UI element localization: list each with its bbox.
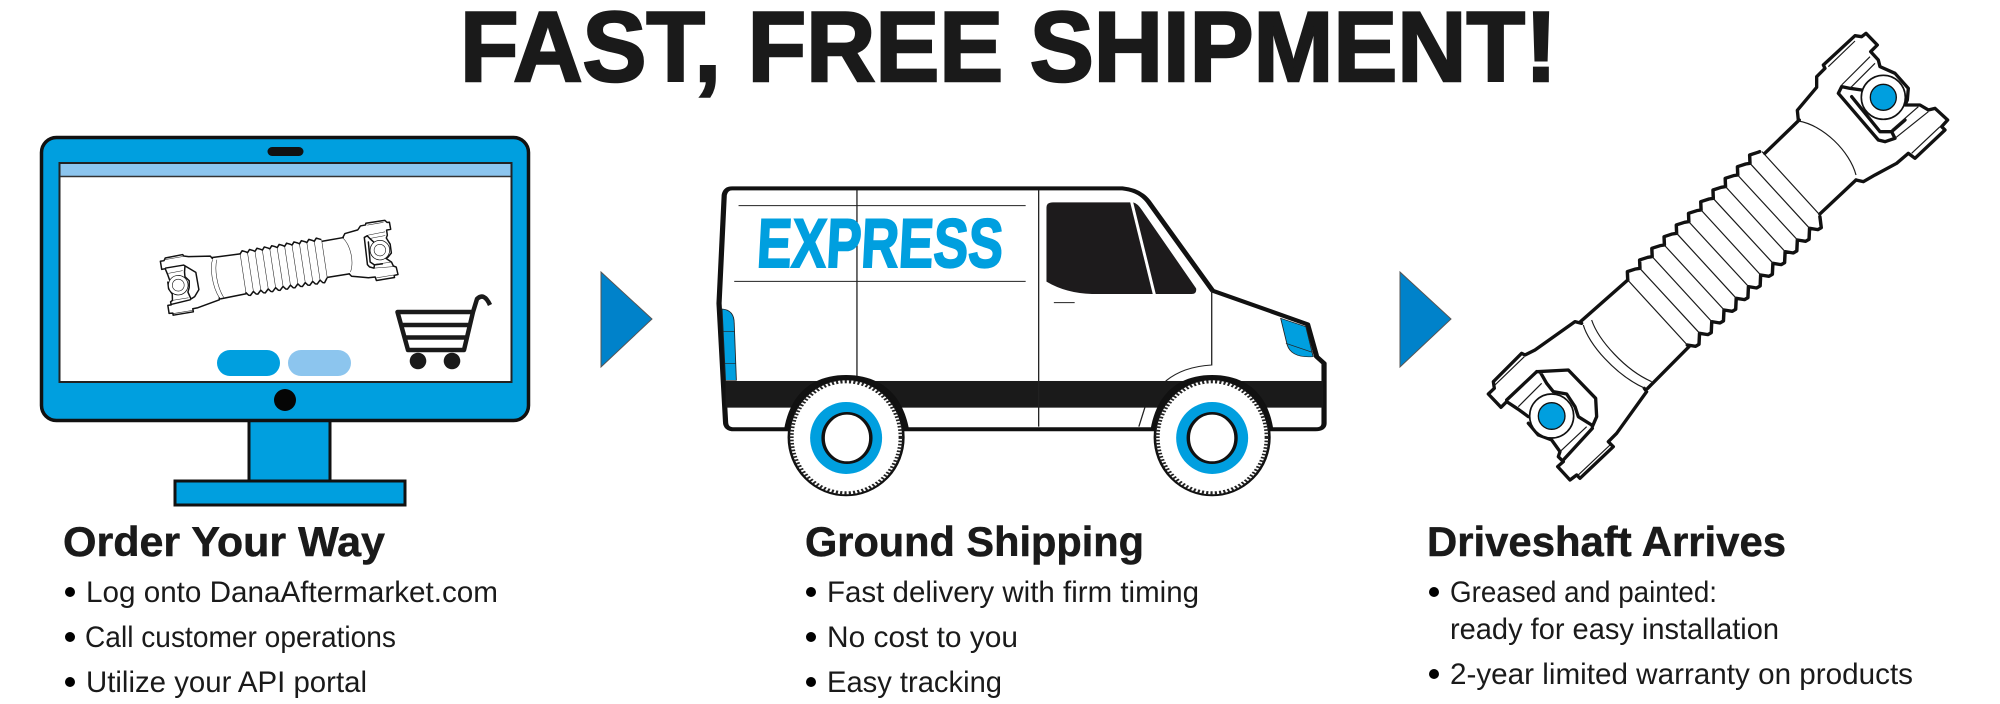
heading: Order Your Way (63, 518, 386, 565)
monitor base (175, 481, 405, 505)
list item: Easy tracking (827, 666, 1002, 699)
panel lines (734, 190, 1212, 427)
camera (274, 389, 296, 411)
monitor stand (249, 420, 330, 482)
rear wheel (784, 375, 909, 495)
heading: Ground Shipping (805, 518, 1144, 565)
list item (1429, 576, 1779, 646)
monitor frame (42, 138, 528, 420)
arrow 1 (601, 272, 652, 367)
list item: 2-year limited warranty on products (1450, 658, 1913, 691)
headlight (1281, 318, 1313, 357)
black band (726, 381, 1323, 408)
icon: delivery van (719, 188, 1324, 495)
list item: Greased and painted: (1450, 576, 1717, 609)
list item: Fast delivery with firm timing (827, 576, 1199, 609)
arrow 2 (1400, 272, 1451, 367)
list item: No cost to you (827, 621, 1018, 654)
icon: shopping cart (398, 297, 490, 369)
list item: ready for easy installation (1450, 613, 1779, 646)
list item: Utilize your API portal (86, 666, 367, 699)
button: secondary (288, 350, 351, 376)
icon: computer monitor (42, 128, 528, 505)
heading: Driveshaft Arrives (1427, 518, 1786, 565)
button: primary (217, 350, 280, 376)
van body (719, 188, 1324, 429)
van lettering: EXPRESS (755, 204, 1005, 282)
icon: small driveshaft (139, 128, 420, 407)
panel: order your way (63, 518, 498, 699)
icon: large driveshaft (1488, 33, 1948, 480)
list item: Log onto DanaAftermarket.com (86, 576, 498, 609)
browser bar (60, 164, 510, 176)
panel: driveshaft arrives (1427, 518, 1913, 691)
windows (1046, 202, 1153, 294)
tail light (722, 309, 736, 380)
list item: Call customer operations (85, 621, 396, 654)
front wheel (1151, 375, 1273, 495)
monitor speaker (268, 147, 304, 156)
screen (60, 163, 512, 382)
panel: ground shipping (805, 518, 1199, 699)
